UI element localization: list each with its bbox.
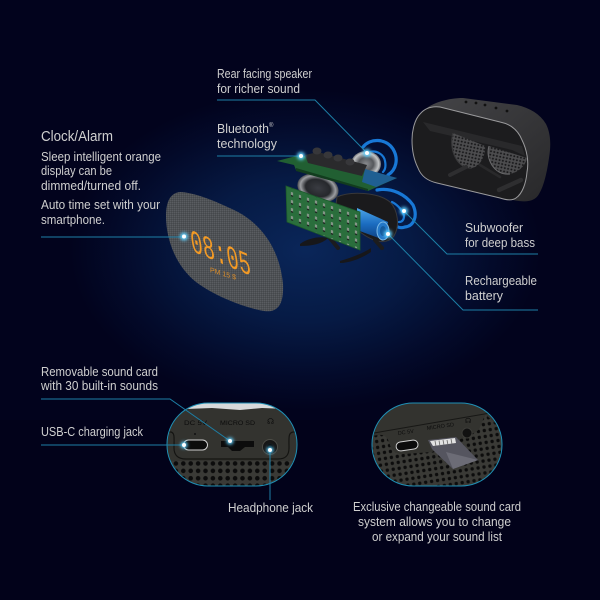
ports close-up: MICRO SD — [220, 420, 255, 427]
caption: sound card system: system allows you to change — [358, 515, 511, 529]
front speaker — [294, 169, 342, 207]
callout: clock and alarm: smartphone. — [41, 213, 105, 227]
callout: bluetooth: Bluetooth — [217, 122, 269, 136]
callout: clock and alarm: dimmed/turned off. — [41, 179, 141, 193]
callout: bluetooth — [217, 122, 305, 160]
caption: sound card system — [353, 500, 521, 544]
ports close-up: DC 5V — [184, 420, 208, 427]
clock date: PM 15 $ — [210, 266, 236, 282]
feet — [300, 237, 328, 246]
rear speaker — [351, 151, 381, 177]
sound card close-up: DC 5V — [397, 429, 415, 437]
callout: clock and alarm — [41, 129, 188, 240]
callout: rechargeable battery: battery — [465, 289, 504, 303]
callout: USB-C: USB-C charging jack — [41, 425, 144, 439]
callout: clock and alarm: display can be — [41, 164, 112, 178]
callout: subwoofer — [400, 207, 538, 254]
callout: bluetooth: technology — [217, 137, 278, 151]
sound card close-up: ☊ — [465, 417, 471, 425]
caption: sound card system: or expand your sound list — [372, 530, 502, 544]
ports close-up: ☊ — [267, 417, 274, 426]
callout: rechargeable battery — [384, 230, 538, 310]
callout: rear facing speaker: Rear facing speaker — [217, 67, 312, 81]
callout: rechargeable battery: Rechargeable — [465, 274, 537, 288]
micro SD card — [428, 437, 478, 469]
callout: clock and alarm: Auto time set with your — [41, 198, 160, 212]
top circuit board — [277, 155, 397, 191]
callout: removable sound card: with 30 built-in sounds — [40, 379, 158, 393]
product: clock front — [166, 192, 283, 311]
callout: rear facing speaker: for richer sound — [217, 82, 300, 96]
sound card close-up — [372, 403, 502, 486]
callout: removable sound card: Removable sound card — [41, 365, 158, 379]
ports close-up — [167, 403, 297, 486]
callout: clock and alarm: Sleep intelligent orange — [41, 150, 161, 164]
callout: clock and alarm: Clock/Alarm — [41, 129, 113, 145]
infographic — [41, 68, 550, 544]
callout: subwoofer: Subwoofer — [465, 221, 523, 235]
callout: subwoofer: for deep bass — [465, 236, 535, 250]
callout: bluetooth: ® — [269, 122, 274, 129]
callout: rear facing speaker — [217, 67, 371, 157]
black chassis — [335, 193, 397, 242]
callout: USB-C — [41, 425, 188, 448]
blue sound waves — [363, 140, 415, 228]
product: rear housing — [412, 98, 550, 201]
product: exploded internals — [277, 140, 415, 263]
callout: headphone jack — [228, 446, 314, 515]
buttons block — [305, 152, 367, 176]
fabric face — [166, 192, 283, 311]
battery — [357, 208, 388, 240]
clock digits: 08:05 — [188, 224, 253, 287]
callout: headphone jack: Headphone jack — [228, 501, 314, 515]
sound card close-up: MICRO SD — [426, 422, 455, 432]
callout: removable sound card — [40, 365, 233, 444]
main circuit board — [286, 186, 360, 250]
caption: sound card system: Exclusive changeable sound card — [353, 500, 521, 514]
